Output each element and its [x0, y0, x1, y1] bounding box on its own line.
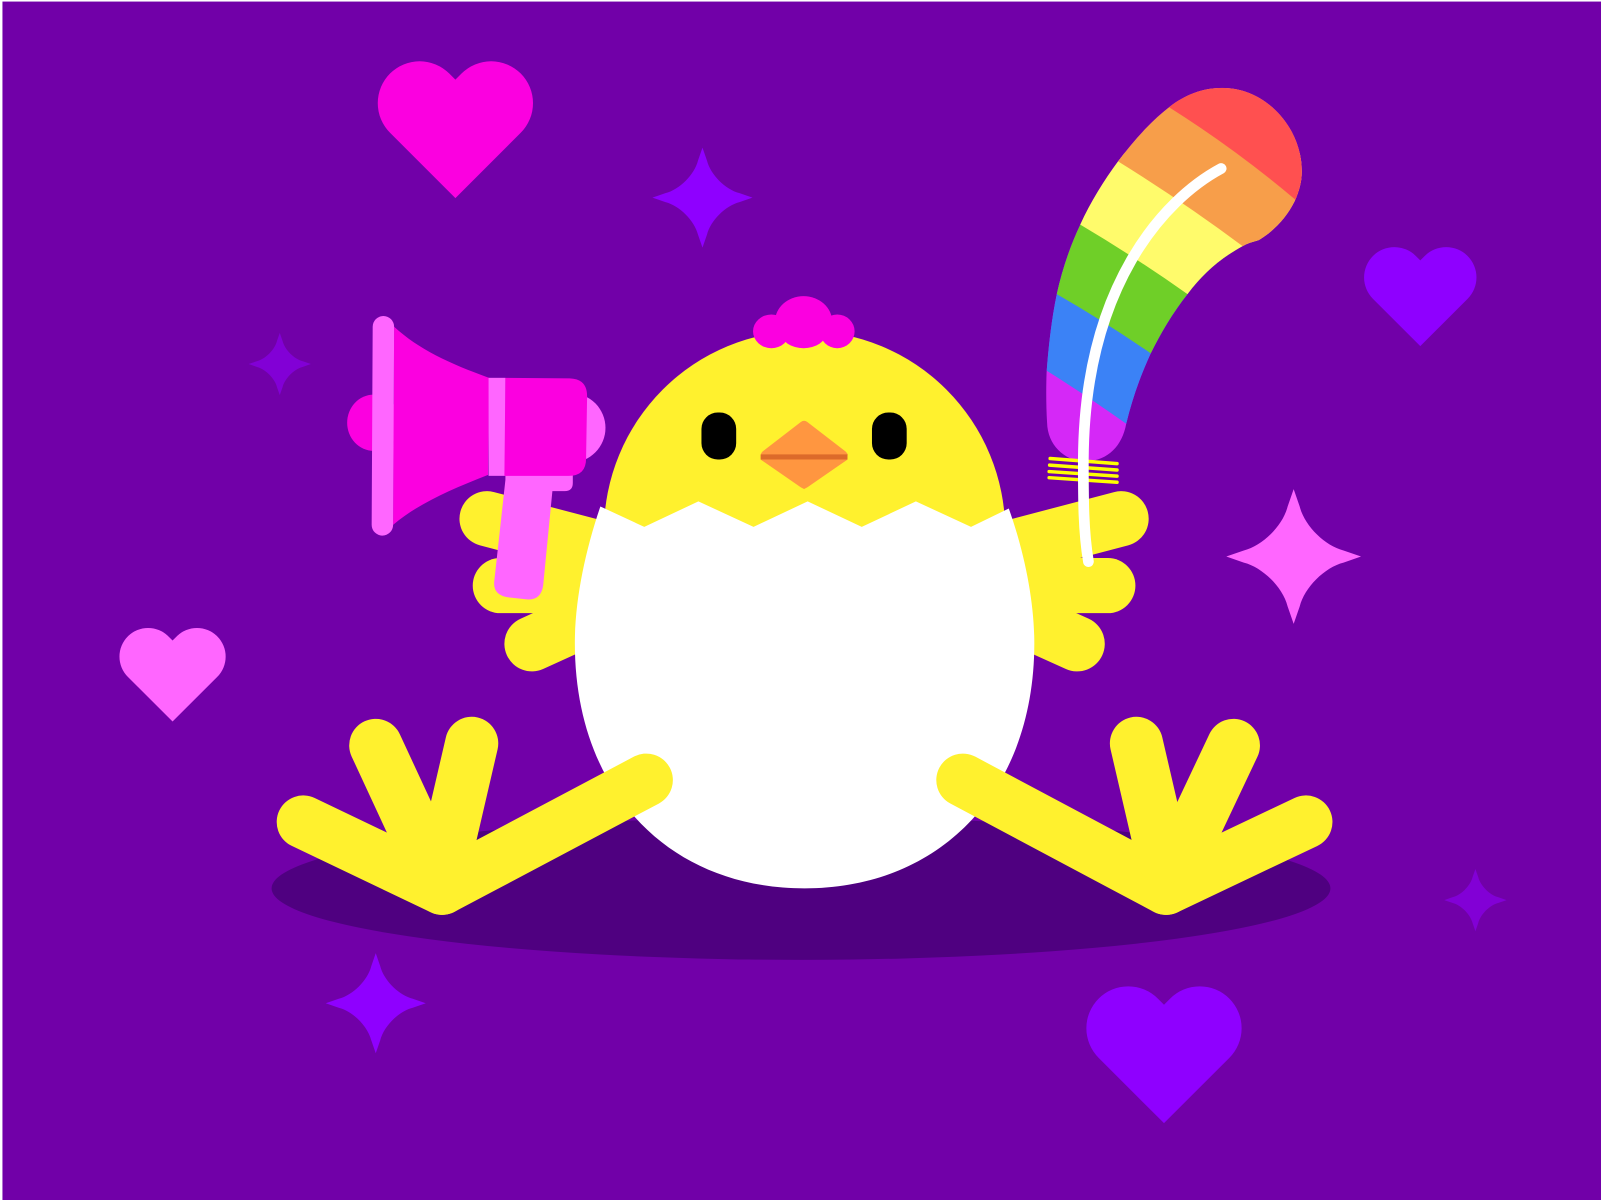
megaphone rim [372, 316, 394, 536]
feather quill [1083, 169, 1221, 562]
heart: right violet [1364, 247, 1476, 346]
sparkle: small left [249, 333, 311, 395]
heart: bottom violet [1086, 986, 1242, 1123]
sparkle: bottom left violet [326, 953, 426, 1053]
right foot [963, 743, 1306, 888]
megaphone front bump [347, 395, 400, 451]
megaphone handle [494, 474, 573, 599]
left foot [303, 743, 646, 888]
feather binding strings [1049, 458, 1117, 482]
chick head [604, 331, 1005, 732]
right eye [872, 413, 907, 460]
sparkle: large pink right [1226, 489, 1361, 624]
megaphone band [489, 378, 505, 476]
left wing [487, 519, 623, 644]
sparkle: top centre violet [652, 148, 753, 248]
ground shadow [272, 817, 1330, 960]
beak [761, 421, 848, 489]
crest [753, 296, 855, 348]
sparkle: small right [1444, 869, 1507, 931]
megaphone body [504, 378, 587, 476]
egg shell [575, 501, 1034, 888]
heart: left pink [119, 628, 226, 722]
megaphone horn [393, 327, 489, 525]
left eye [701, 413, 736, 460]
right wing [985, 519, 1121, 644]
feather stripes [1046, 88, 1302, 460]
heart: top magenta [378, 61, 533, 198]
rainbow feather [1046, 88, 1302, 567]
megaphone rear bump [536, 393, 605, 463]
megaphone [347, 316, 605, 599]
